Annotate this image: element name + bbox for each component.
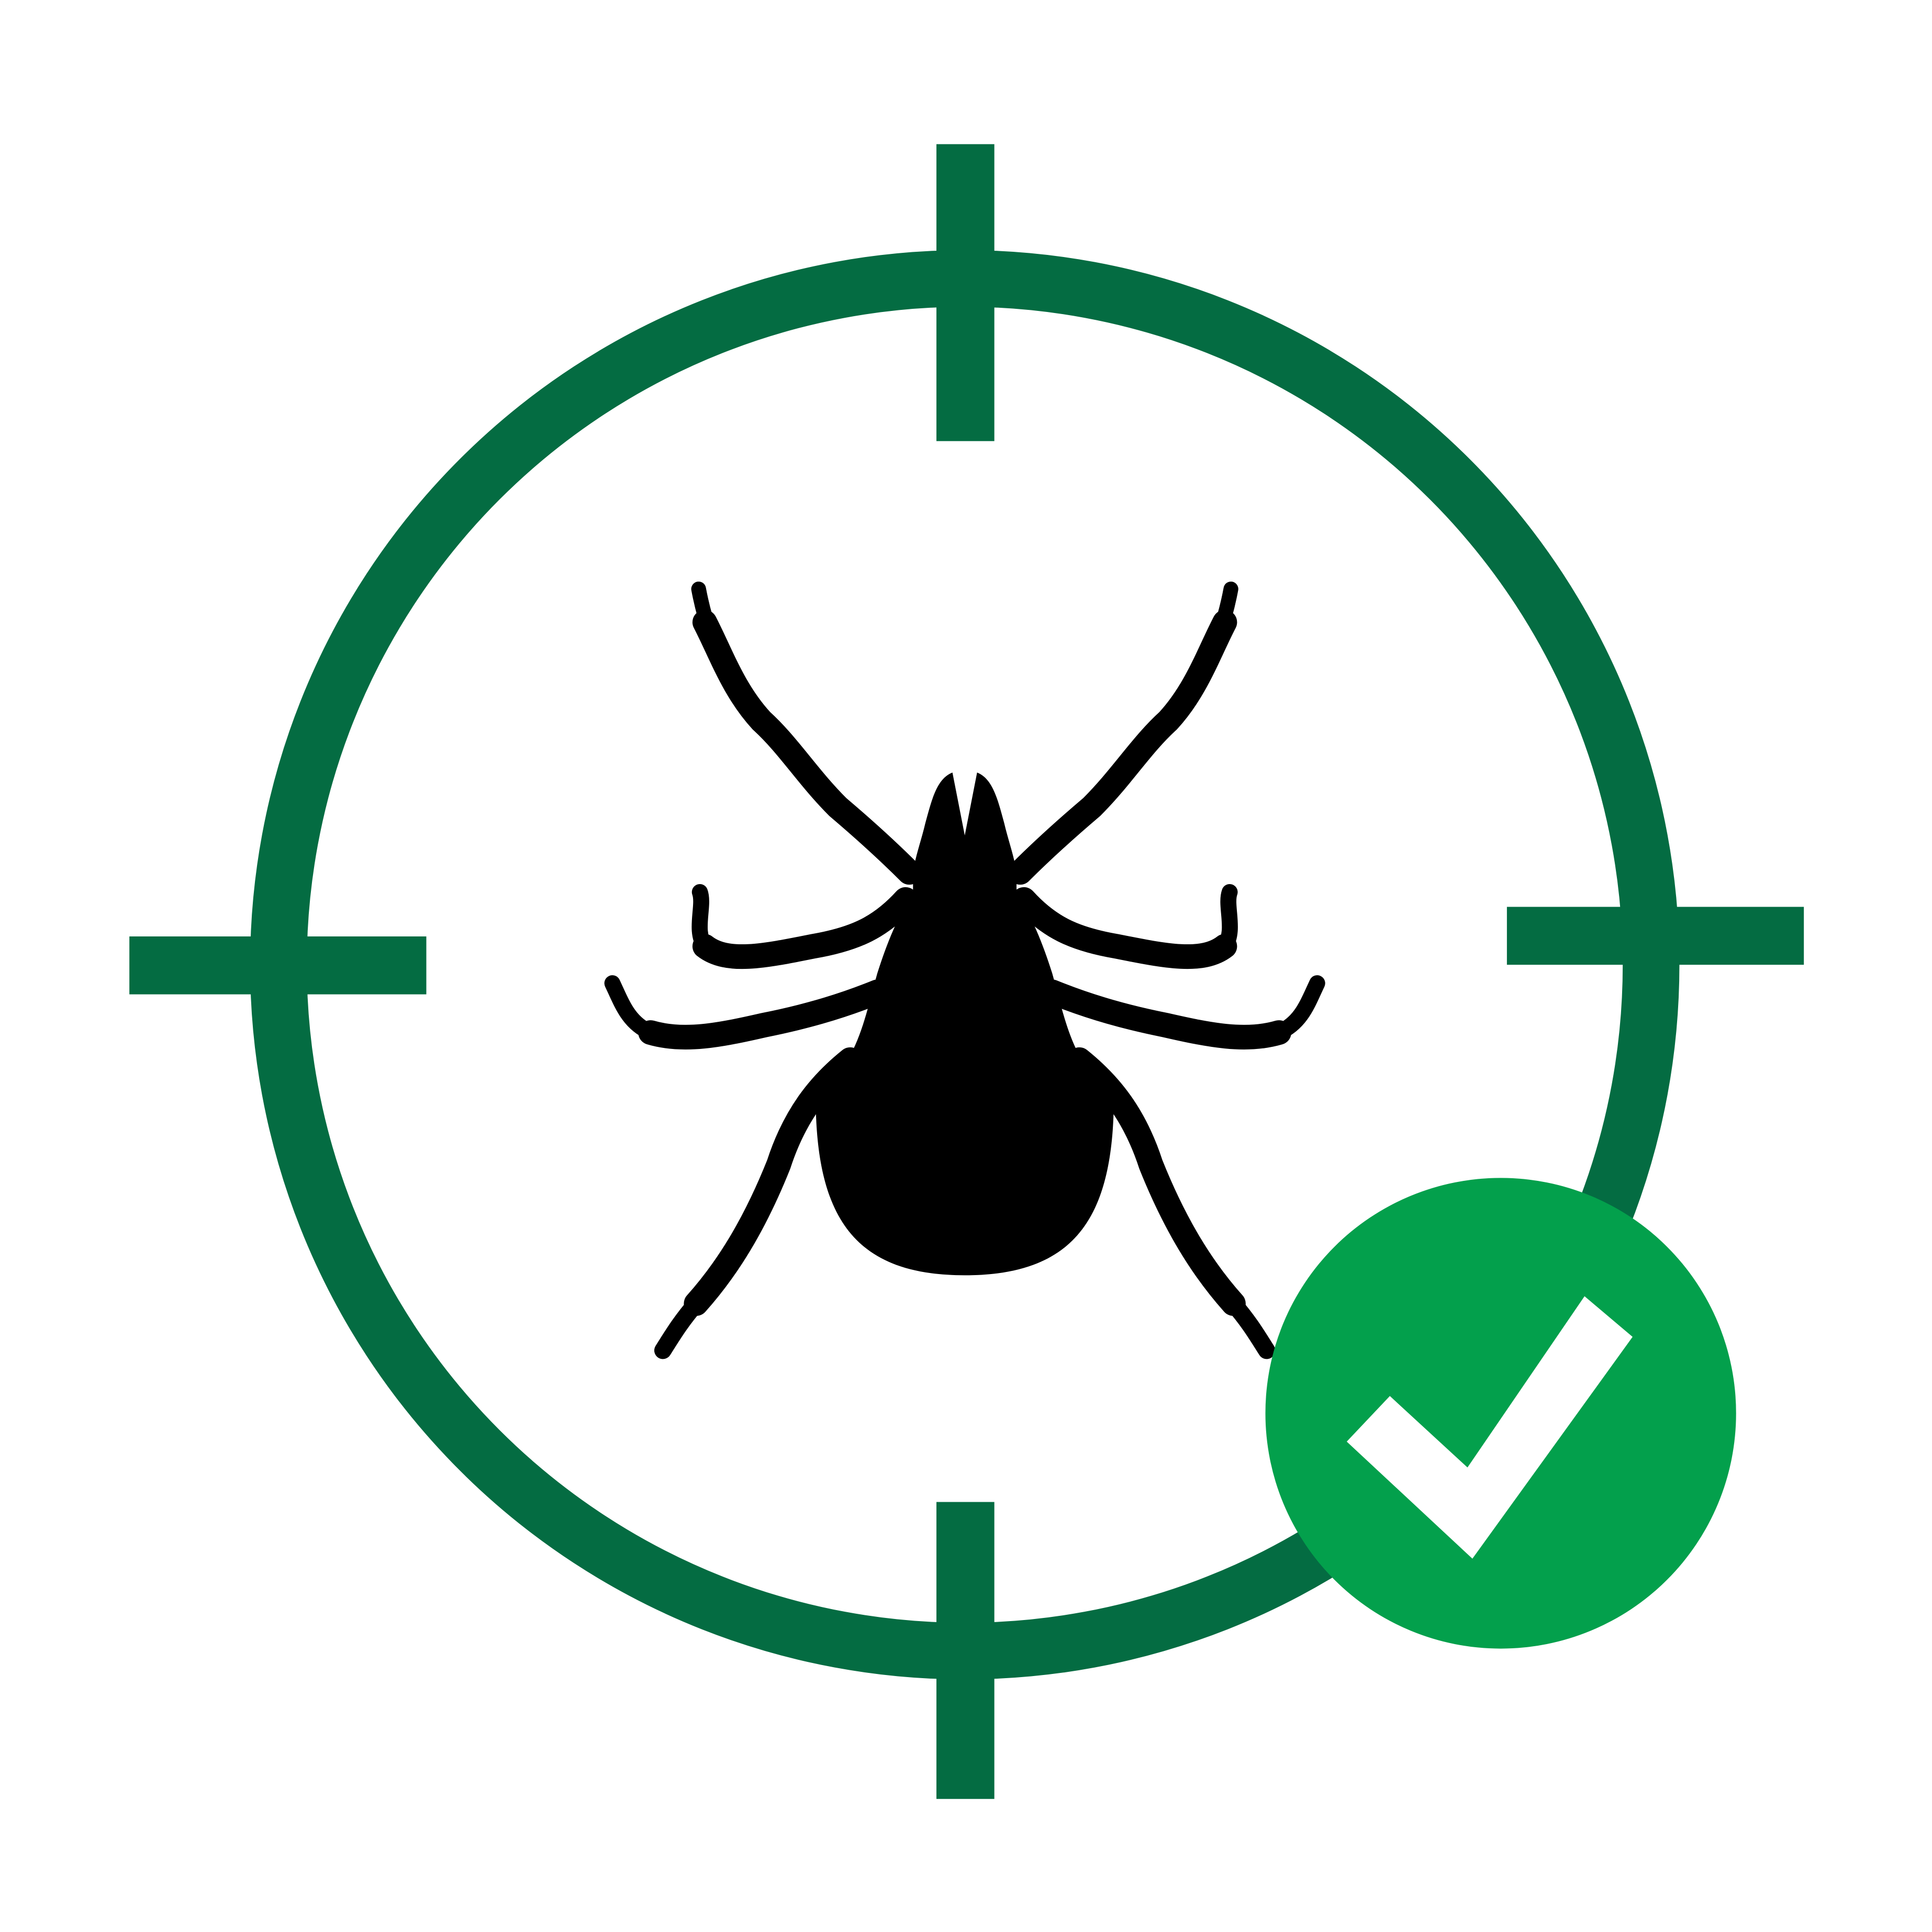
crosshair: bottom [936, 1502, 995, 1799]
target ring [278, 278, 1651, 1651]
crosshair: top [936, 144, 995, 441]
icon: checkmark [1347, 1296, 1633, 1559]
crosshair: left [129, 936, 426, 995]
badge: check circle [1266, 1178, 1736, 1649]
crosshair: right [1507, 907, 1804, 965]
icon: tick [612, 589, 1317, 1350]
